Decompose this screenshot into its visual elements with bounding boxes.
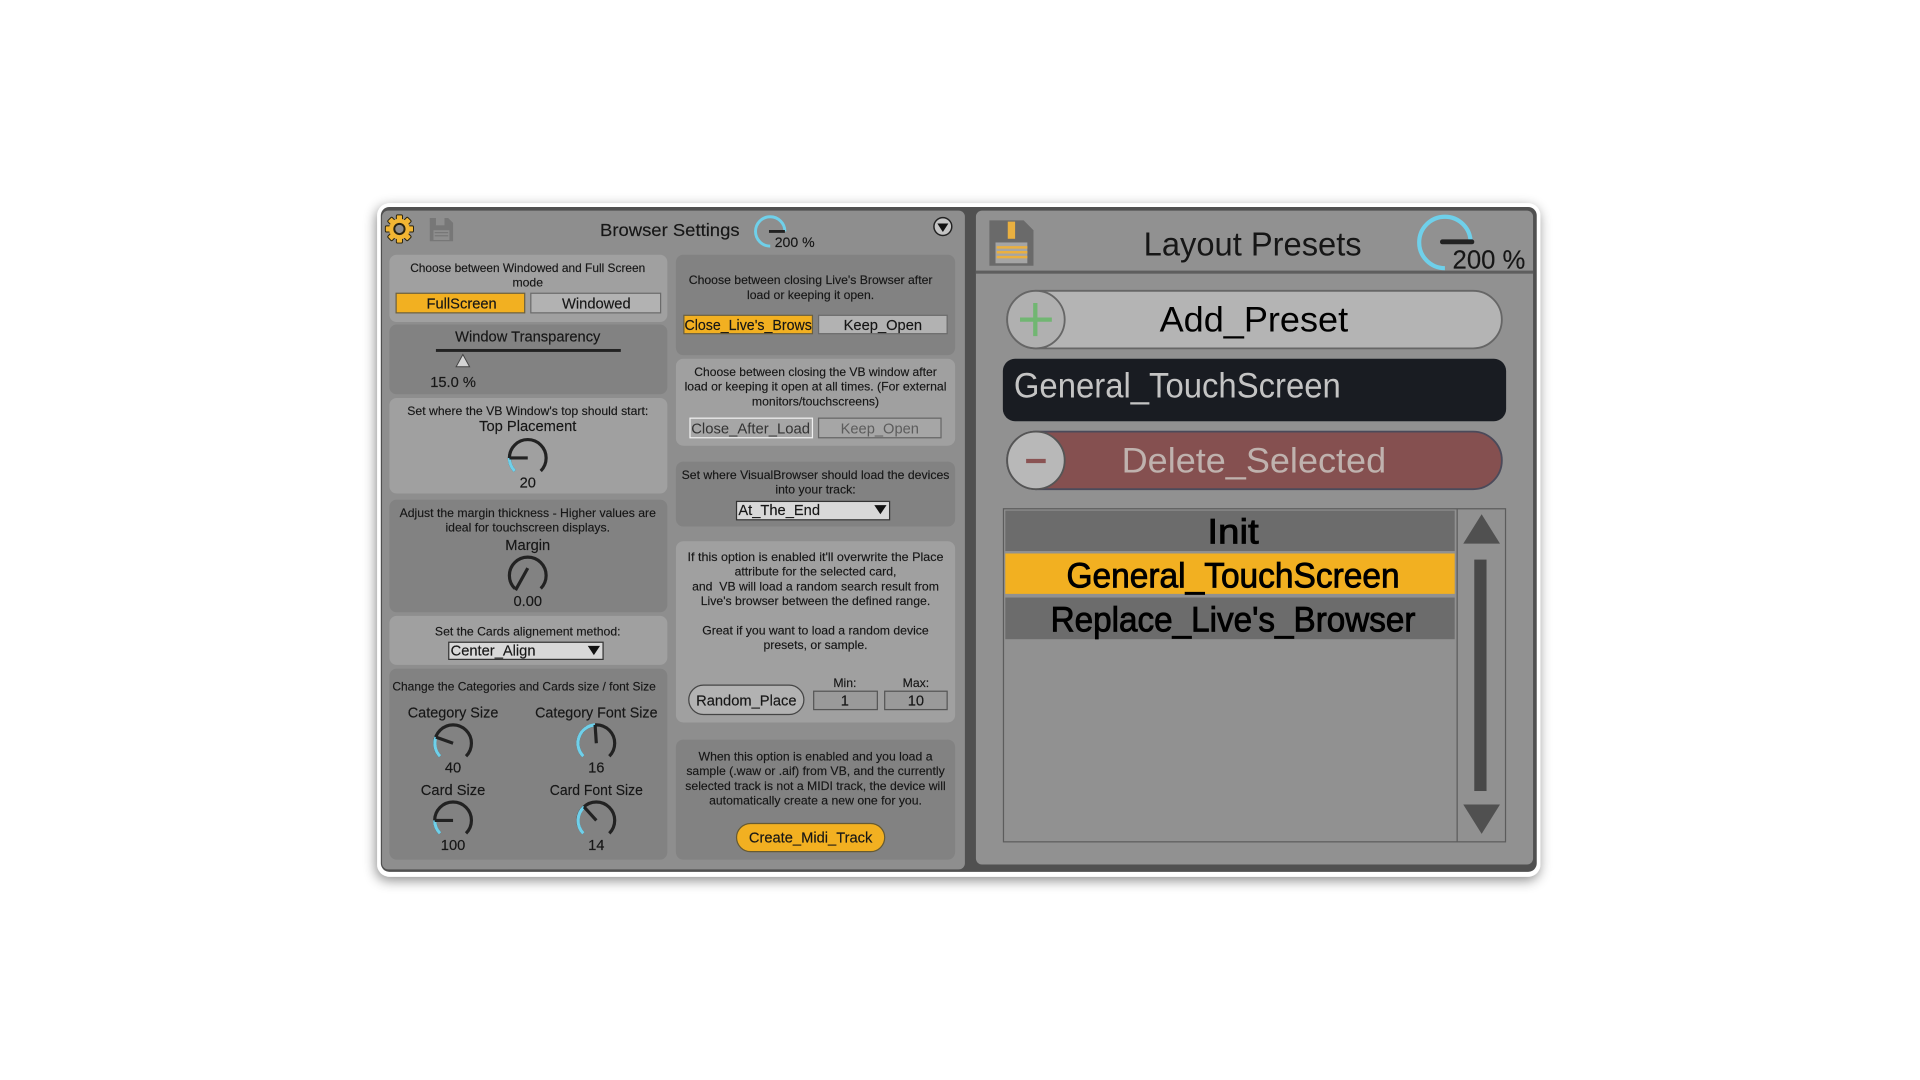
section: random place	[676, 541, 955, 722]
section: margin: Margin	[505, 538, 550, 554]
section: window mode: Choose between Windowed and Full Screen	[410, 261, 645, 275]
knob: margin	[509, 557, 546, 590]
button: add preset: Add_Preset	[1160, 300, 1348, 340]
section: sizes: Category Size	[408, 706, 498, 722]
device window	[377, 203, 1540, 877]
field: max: Max:	[903, 676, 929, 690]
section: random place: attribute for the selected card,	[735, 565, 896, 579]
section: random place: If this option is enabled it'll overwrite the Place	[688, 550, 944, 564]
list item: init: Init	[1207, 511, 1259, 551]
section: create midi track	[676, 740, 955, 860]
section: top placement: Top Placement	[479, 419, 576, 435]
section: sizes: Change the Categories and Cards size / font Size	[392, 680, 656, 694]
section: close vb window	[676, 359, 955, 446]
section: close live's browser: load or keeping it open.	[747, 288, 874, 302]
button: random place	[689, 685, 804, 714]
dropdown: at the end	[737, 501, 890, 520]
dropdown: center align: Center_Align	[451, 643, 536, 659]
section: create midi track: selected track is not a MIDI track, the device will	[685, 779, 946, 793]
field: max: 10	[908, 693, 924, 709]
section: random place: Great if you want to load a random device	[702, 623, 929, 637]
section: top placement: Set where the VB Window's top should start:	[407, 404, 648, 418]
section: device placement: Set where VisualBrowser should load the devices	[682, 468, 949, 482]
heading: browser settings: Browser Settings	[600, 220, 740, 240]
dropdown: center align	[449, 642, 603, 659]
section: random place: presets, or sample.	[763, 638, 868, 652]
section: window transparency: Window Transparency	[455, 330, 601, 346]
button: fullscreen	[396, 293, 525, 313]
list item: init	[1005, 511, 1455, 551]
section: margin: 0.00	[513, 594, 542, 610]
header divider	[976, 271, 1533, 274]
section: create midi track: When this option is enabled and you load a	[699, 749, 933, 763]
knob: card font size	[578, 802, 615, 833]
section: top placement	[389, 398, 667, 493]
knob: card size	[435, 802, 471, 833]
field: min	[814, 676, 877, 710]
section: margin: Adjust the margin thickness - Higher values are	[400, 506, 656, 520]
section: sizes	[389, 669, 667, 860]
section: card alignment: Set the Cards alignement method:	[435, 625, 621, 639]
knob: category size	[435, 725, 471, 756]
panel: browser settings background	[382, 211, 965, 869]
section: sizes: Category Font Size	[535, 706, 658, 722]
icon: floppy disk	[430, 218, 453, 241]
section: sizes: Card Size	[421, 783, 485, 799]
section: window mode	[389, 255, 667, 322]
zoom dial small	[756, 217, 815, 250]
button: keep open disabled: Keep_Open	[841, 422, 919, 438]
button: random place: Random_Place	[696, 693, 797, 709]
section: close live's browser	[676, 255, 955, 355]
knob: category font size	[578, 725, 615, 756]
list item: general touchscreen: General_TouchScreen	[1067, 556, 1400, 596]
preset name field	[1003, 359, 1506, 421]
section: margin: ideal for touchscreen displays.	[445, 521, 610, 535]
scrollbar	[1474, 560, 1487, 791]
zoom dial large: 200 %	[1453, 247, 1525, 275]
button: create midi track	[737, 823, 885, 852]
icon: gear	[385, 215, 414, 243]
section: random place: and VB will load a random search result from	[692, 579, 939, 593]
button: fullscreen: FullScreen	[427, 297, 497, 313]
section: sizes: 16	[588, 761, 604, 777]
zoom dial large	[1419, 217, 1525, 275]
icon: collapse arrow	[934, 218, 952, 235]
section: window mode: mode	[512, 276, 543, 290]
section: device placement: into your track:	[775, 483, 856, 497]
button: create midi track: Create_Midi_Track	[749, 831, 873, 847]
zoom dial small: 200 %	[775, 234, 815, 250]
knob: top placement	[509, 440, 546, 471]
section: close live's browser: Choose between closing Live's Browser after	[689, 273, 932, 287]
button: keep open disabled	[819, 418, 941, 438]
button: delete selected: Delete_Selected	[1122, 440, 1386, 480]
field: max	[885, 676, 947, 710]
button: keep open	[819, 315, 947, 334]
scroll arrow down	[1463, 804, 1500, 834]
section: create midi track: sample (.waw or .aif) from VB, and the currently	[686, 764, 946, 778]
list item: replace live's browser: Replace_Live's_Browser	[1051, 600, 1416, 640]
dropdown: at the end: At_The_End	[738, 503, 820, 519]
section: random place: Live's browser between the defined range.	[701, 594, 930, 608]
section: top placement: 20	[520, 475, 536, 491]
section: window transparency	[389, 324, 667, 394]
button: close after load: Close_After_Load	[691, 422, 810, 438]
button: windowed	[531, 293, 661, 313]
section: sizes: 40	[445, 761, 461, 777]
button: keep open: Keep_Open	[844, 318, 922, 334]
preset name field: General_TouchScreen	[1014, 366, 1341, 406]
section: create midi track: automatically create a new one for you.	[709, 794, 922, 808]
panel: browser settings	[385, 215, 955, 860]
section: sizes: 100	[441, 838, 465, 854]
section: margin	[389, 500, 667, 612]
preset list	[1003, 509, 1506, 842]
field: min: 1	[841, 693, 849, 709]
section: close vb window: monitors/touchscreens)	[752, 394, 879, 408]
heading: layout presets: Layout Presets	[1144, 226, 1362, 263]
button: close live's browser: Close_Live's_Brows	[684, 318, 812, 334]
field: min: Min:	[833, 676, 856, 690]
section: window transparency: 15.0 %	[430, 375, 476, 391]
section: device placement	[676, 462, 955, 527]
panel: layout presets background	[976, 211, 1533, 864]
section: card alignment	[389, 616, 667, 665]
button: add preset	[1007, 291, 1502, 348]
panel: layout presets	[976, 217, 1533, 842]
section: sizes: Card Font Size	[550, 783, 643, 799]
icon: floppy save	[989, 220, 1033, 266]
section: sizes: 14	[588, 838, 604, 854]
section: close vb window: load or keeping it open at all times. (For external	[685, 380, 946, 394]
button: delete selected	[1007, 432, 1502, 489]
button: windowed: Windowed	[562, 297, 631, 313]
section: close vb window: Choose between closing the VB window after	[694, 365, 937, 379]
scroll arrow up	[1463, 514, 1500, 544]
